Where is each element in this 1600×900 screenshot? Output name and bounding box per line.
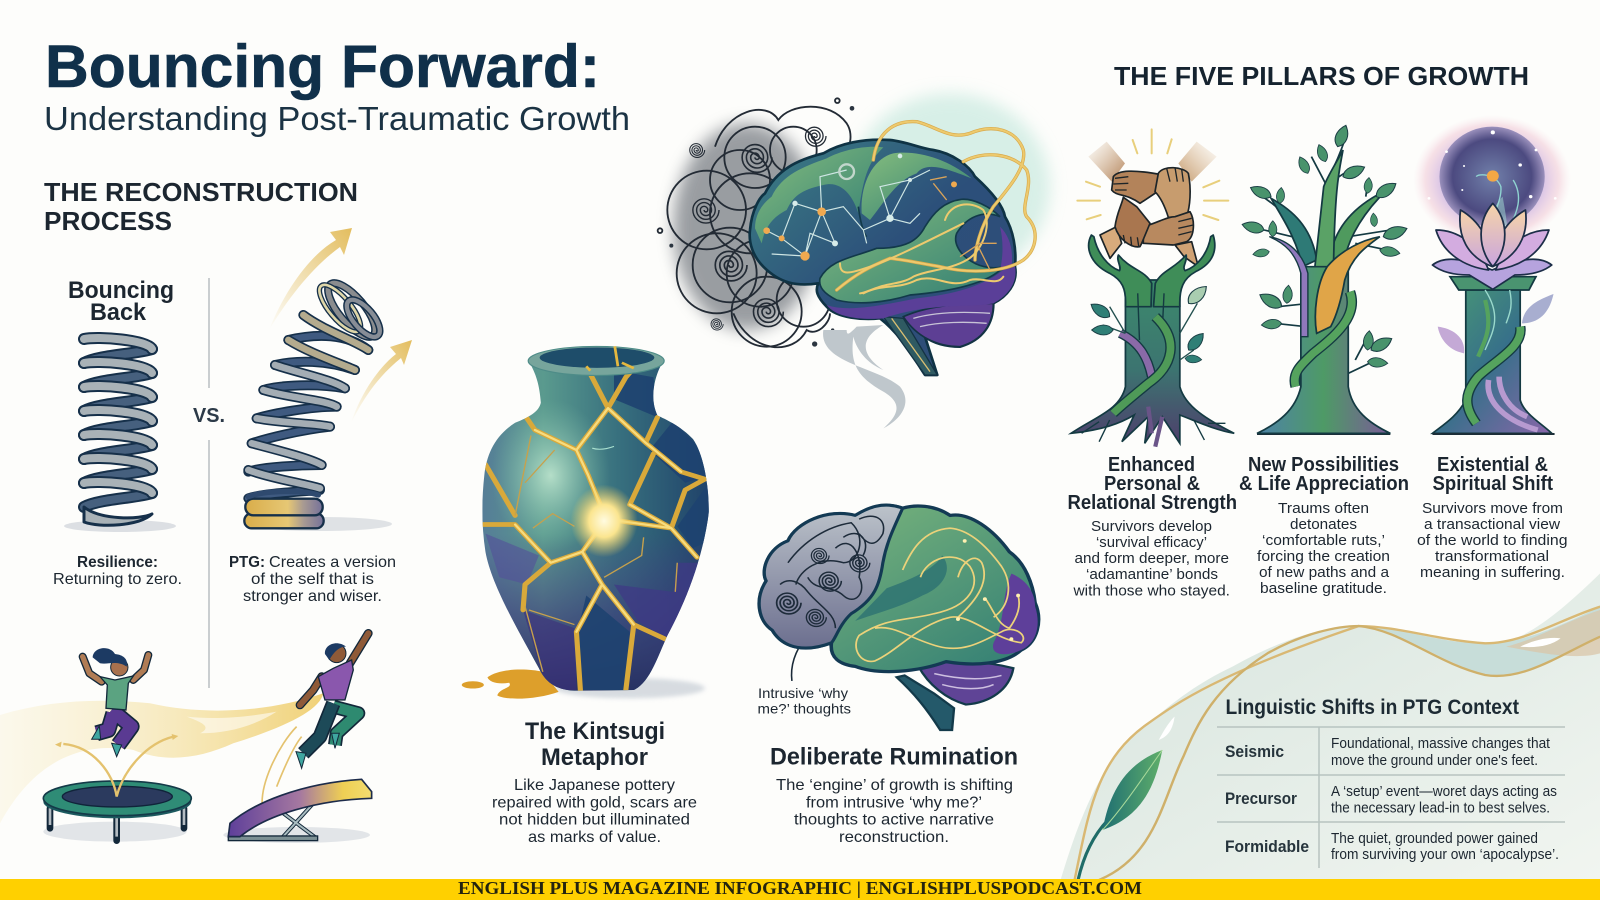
pillar 2 text (1239, 454, 1409, 597)
table heading: Linguistic Shifts in PTG Context (1226, 696, 1519, 719)
pillar 2 illustration: branching tree (1241, 123, 1409, 434)
pillar 1 text (1068, 454, 1237, 600)
deliberate rumination text: from intrusive ‘why me?’ (806, 794, 982, 812)
row: seismic (1225, 736, 1550, 769)
deliberate rumination text (770, 744, 1018, 846)
row: precursor: A ‘setup’ event—woret days acting as (1331, 784, 1557, 800)
pillar 3 text: Spiritual Shift (1432, 473, 1553, 495)
row: seismic: Foundational, massive changes that (1331, 736, 1550, 752)
row: precursor: the necessary lead-in to best selves. (1331, 800, 1550, 816)
bouncing back label (68, 277, 174, 326)
branches (1257, 140, 1401, 373)
deliberate rumination text: thoughts to active narrative (794, 812, 994, 828)
row: precursor: Precursor (1225, 789, 1297, 808)
scribble tangle (658, 98, 851, 347)
green hands and trunk (1071, 280, 1234, 443)
top rings (321, 276, 383, 344)
pillar 2 text: ‘comfortable ruts,’ (1262, 532, 1385, 549)
vase rim (528, 346, 664, 375)
side leaves (1103, 303, 1197, 360)
resilience caption: Returning to zero. (53, 571, 182, 588)
grey lobe (759, 505, 903, 648)
gold base discs (244, 513, 324, 528)
pillar 2 text: of new paths and a (1259, 564, 1390, 581)
heading: the reconstruction process (44, 177, 358, 236)
deliberate rumination text: Deliberate Rumination (770, 744, 1018, 770)
woman figure (83, 655, 148, 682)
vs divider: VS. (193, 405, 225, 427)
icon: growth spring with arrows (244, 228, 412, 531)
pillar 2 text: forcing the creation (1257, 548, 1390, 565)
arrow: large gold up (269, 228, 352, 330)
row: seismic: Seismic (1225, 742, 1284, 761)
green gyri (755, 147, 883, 243)
kintsugi metaphor text: repaired with gold, scars are (492, 794, 697, 812)
leaves (1241, 123, 1409, 368)
row: formidable: The quiet, grounded power gained (1331, 831, 1538, 847)
pillar 3 text (1417, 454, 1568, 581)
brain body (750, 140, 1016, 375)
pillar 1 text: ‘adamantine’ bonds (1086, 566, 1218, 583)
kintsugi metaphor text (492, 718, 697, 846)
pillar 1 text: Relational Strength (1068, 492, 1237, 514)
resilience caption: Resilience: (77, 554, 158, 571)
title (44, 33, 630, 137)
column (1432, 290, 1552, 433)
callout: intrusive thoughts (758, 685, 851, 716)
icon: main brain with chaos to order (658, 93, 1050, 428)
pillar 2 text: Traums often (1278, 500, 1369, 517)
pillar 1 text: with those who stayed. (1072, 582, 1230, 600)
cerebellum (903, 303, 993, 347)
PTG caption: Creates a version (269, 554, 396, 571)
pillar 3 text: a transactional view (1424, 516, 1560, 533)
bouncing back label: Back (90, 299, 147, 326)
white neural network (767, 164, 930, 256)
brain silhouette green (759, 505, 1039, 672)
pillar 1 text: Survivors develop (1091, 518, 1212, 535)
pillar 1 text: ‘survival efficacy’ (1096, 534, 1207, 551)
panel: linguistic shifts table (1217, 696, 1565, 868)
PTG caption: of the self that is (251, 571, 374, 588)
bottom-right swoosh panel (1061, 573, 1600, 880)
PTG caption (229, 554, 396, 605)
title: Understanding Post-Traumatic Growth (44, 100, 630, 137)
icon: trampoline with jumping woman (43, 648, 191, 842)
footer bar: ENGLISH PLUS MAGAZINE INFOGRAPHIC | ENGLISHPLUSPODCAST.COM (458, 878, 1142, 898)
resilience caption (53, 554, 182, 588)
pillar 2 text: & Life Appreciation (1239, 473, 1409, 495)
heading: the reconstruction process: PROCESS (44, 206, 172, 236)
callout: intrusive thoughts: Intrusive ‘why (758, 685, 848, 701)
pillar 3 text: transformational (1435, 548, 1549, 565)
pale side leaves (1522, 294, 1554, 323)
pillar 1 text: and form deeper, more (1074, 550, 1229, 567)
bouncing back label: Bouncing (68, 277, 174, 304)
kintsugi metaphor text: Like Japanese pottery (514, 777, 675, 794)
pillar 1 illustration: hands and roots (1071, 129, 1234, 447)
footer bar (0, 878, 1600, 900)
icon: rumination brain (759, 505, 1039, 730)
arrow: small gold up (351, 340, 412, 423)
row: seismic: move the ground under one's feet. (1331, 753, 1538, 769)
row: formidable: Formidable (1225, 837, 1309, 856)
deliberate rumination text: The ‘engine’ of growth is shifting (776, 777, 1013, 794)
icon: resilience spring (64, 338, 176, 532)
kintsugi metaphor text: as marks of value. (528, 829, 661, 846)
pillar 1 text: Personal & (1104, 473, 1200, 495)
icon: green leaf (1078, 750, 1162, 880)
pillar 2 text: New Possibilities (1248, 454, 1399, 476)
decorative gold sweep behind bounce figures (0, 693, 323, 823)
pillar 3 text: Existential & (1437, 454, 1548, 476)
smoke wisp (823, 325, 905, 428)
heading: the reconstruction process: THE RECONSTRUCTION (44, 177, 358, 207)
linked human hands (1077, 129, 1228, 267)
pillar 3 text: meaning in suffering. (1420, 564, 1565, 581)
pillar 2 text: detonates (1290, 516, 1357, 533)
pillar 3 illustration: lotus on column (1413, 115, 1571, 434)
pillar 3 text: Survivors move from (1422, 500, 1563, 517)
deliberate rumination text: reconstruction. (839, 829, 949, 846)
gold cracks (483, 368, 705, 690)
PTG caption: PTG: (229, 554, 265, 571)
callout: intrusive thoughts: me?’ thoughts (758, 700, 851, 716)
kintsugi metaphor text: not hidden but illuminated (499, 812, 690, 828)
pillar 3 text: of the world to finding (1417, 532, 1568, 549)
PTG caption: stronger and wiser. (243, 588, 382, 605)
kintsugi metaphor text: Metaphor (541, 744, 648, 771)
row: precursor (1225, 784, 1557, 816)
title: Bouncing Forward: (45, 33, 600, 100)
row: formidable (1225, 831, 1559, 863)
callout pointer (792, 637, 806, 681)
lotus (1432, 203, 1552, 289)
man figure (300, 633, 368, 705)
pillar 1 text: Enhanced (1108, 454, 1195, 476)
icon: springboard with leaping man (223, 633, 372, 843)
kintsugi metaphor text: The Kintsugi (525, 718, 665, 745)
heading: five pillars: THE FIVE PILLARS OF GROWTH (1114, 61, 1529, 91)
icon: kintsugi vase (462, 346, 717, 699)
bounce arcs (63, 737, 173, 797)
gold wires (837, 122, 1035, 290)
pillar 2 text: baseline gratitude. (1260, 580, 1387, 597)
row: formidable: from surviving your own ‘apocalypse’. (1331, 847, 1559, 863)
gold puddle (487, 670, 559, 699)
brain stem (883, 317, 937, 375)
trunk (1257, 267, 1390, 433)
